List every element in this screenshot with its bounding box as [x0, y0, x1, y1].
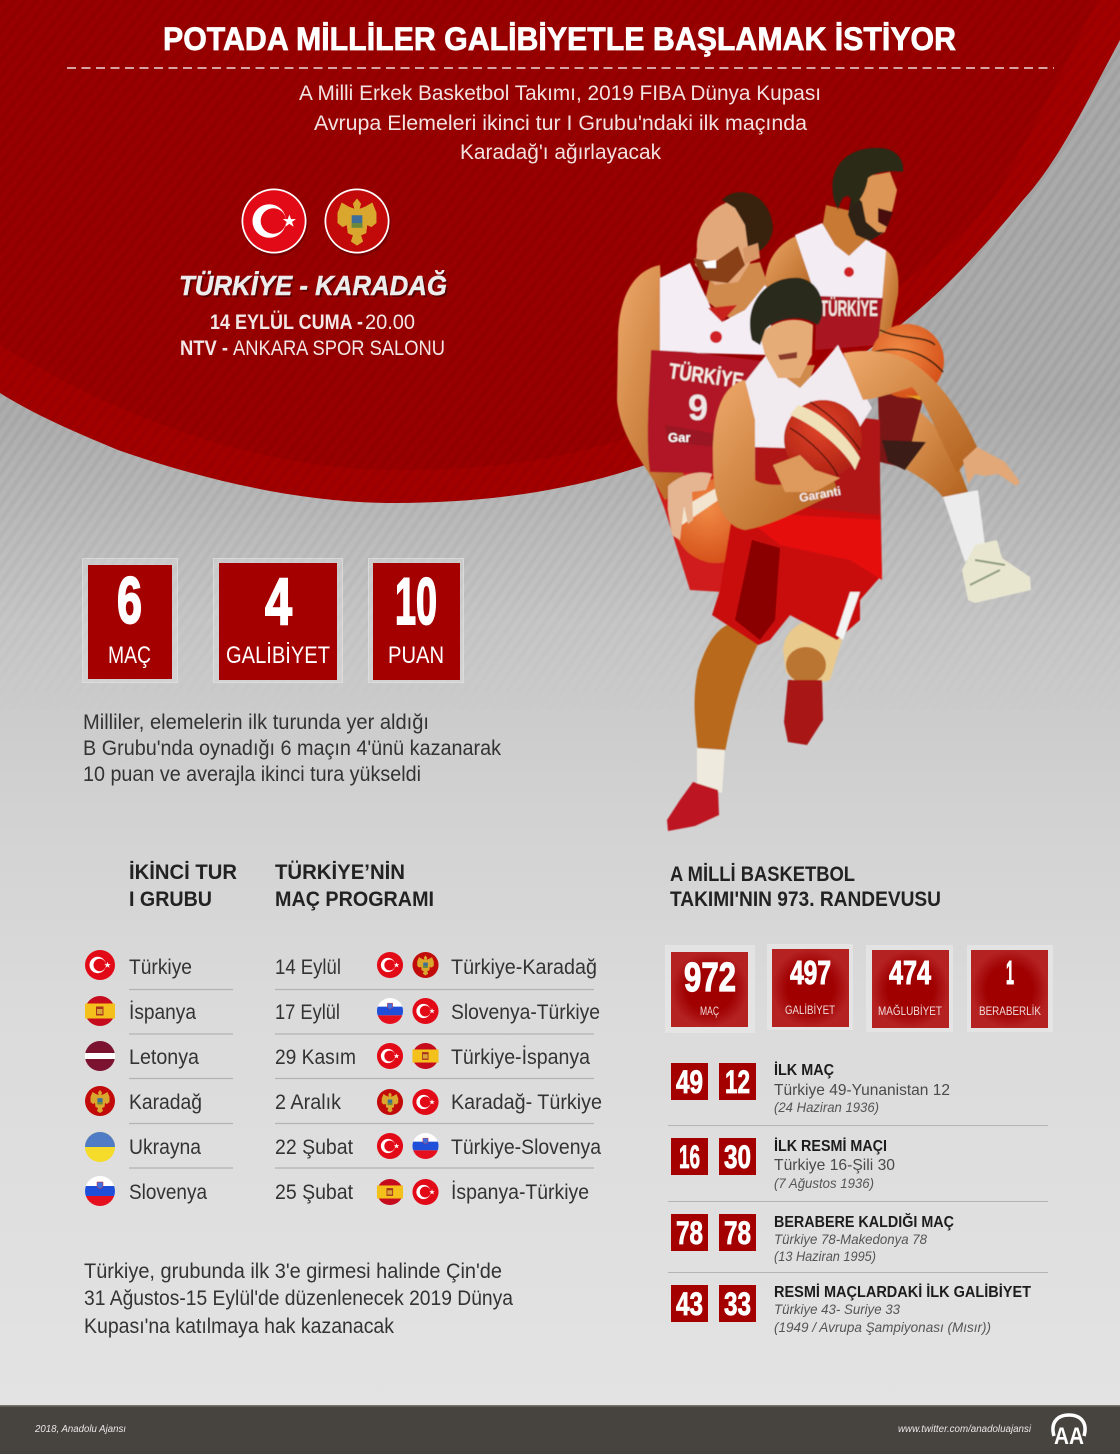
- subtitle: A Milli Erkek Basketbol Takımı, 2019 FIBA Dünya Kupası: [299, 82, 821, 105]
- stat box: 1 beraberlik: 1: [1006, 954, 1014, 991]
- match schedule: İspanya-Türkiye: [451, 1181, 589, 1204]
- match schedule: Slovenya-Türkiye: [451, 1001, 600, 1024]
- icon: Anadolu Agency logo: [1053, 1415, 1085, 1450]
- record row: first match: 12: [725, 1064, 750, 1100]
- stat box: 4 galibiyet: [214, 558, 342, 682]
- match schedule: Türkiye-İspanya: [451, 1046, 590, 1069]
- heading: 973rd match: A MİLLİ BASKETBOL: [670, 863, 855, 886]
- heading: 973rd match: TAKIMI'NIN 973. RANDEVUSU: [670, 888, 941, 911]
- match date and venue: [180, 311, 445, 360]
- record row: first official win: (1949 / Avrupa Şampiyonası (Mısır)): [774, 1319, 991, 1335]
- paragraph: first round result: [83, 711, 501, 786]
- stat box: 6 maç: [82, 558, 178, 682]
- subtitle: Karadağ'ı ağırlayacak: [460, 141, 661, 164]
- match date and venue: 20.00: [365, 311, 415, 334]
- record row: drawn match: Türkiye 78-Makedonya 78: [774, 1231, 927, 1247]
- match schedule: 25 Şubat: [275, 1181, 353, 1204]
- match schedule: 29 Kasım: [275, 1046, 356, 1069]
- record row: first match: İLK MAÇ: [774, 1061, 834, 1079]
- stat box: 6 maç: MAÇ: [108, 642, 151, 669]
- group list: [85, 950, 233, 1206]
- record row: drawn match: (13 Haziran 1995): [774, 1248, 876, 1264]
- stat box: 972 maç: [666, 946, 754, 1032]
- record row: first match: (24 Haziran 1936): [774, 1099, 879, 1115]
- match schedule: 14 Eylül: [275, 956, 341, 979]
- heading: group: [129, 861, 237, 911]
- left player: 9: [688, 387, 708, 428]
- subtitle: Avrupa Elemeleri ikinci tur I Grubu'ndaki ilk maçında: [314, 112, 807, 135]
- record row: first match: [671, 1061, 950, 1115]
- record row: drawn match: 78: [724, 1215, 751, 1251]
- record row: first official match: [671, 1137, 895, 1191]
- heading: group: I GRUBU: [129, 888, 212, 911]
- title: POTADA MİLLİLER GALİBİYETLE BAŞLAMAK İSTİYOR: [163, 21, 956, 57]
- stat box: 4 galibiyet: 4: [265, 564, 292, 638]
- players illustration: [617, 148, 1031, 831]
- red header shape: [0, 0, 1120, 503]
- stat box: 1 beraberlik: BERABERLİK: [979, 1004, 1041, 1018]
- record row: first official match: 16: [679, 1139, 700, 1175]
- heading: match schedule: MAÇ PROGRAMI: [275, 888, 434, 911]
- stat box: 10 puan: PUAN: [388, 642, 444, 669]
- front player: [667, 278, 1020, 831]
- heading: group: İKİNCİ TUR: [129, 861, 237, 884]
- match date and venue: 14 EYLÜL CUMA -: [210, 311, 363, 334]
- stat box: 474 mağlubiyet: MAĞLUBİYET: [878, 1003, 943, 1018]
- stat box: 474 mağlubiyet: [866, 946, 952, 1032]
- stat box: 6 maç: 6: [117, 563, 142, 637]
- group list: Karadağ: [129, 1091, 202, 1114]
- record row: first official win: Türkiye 43- Suriye 33: [774, 1301, 900, 1317]
- match schedule: 2 Aralık: [275, 1091, 341, 1114]
- group list: İspanya: [129, 1001, 196, 1024]
- footer: www.twitter.com/anadoluajansi: [898, 1424, 1032, 1435]
- record row: drawn match: BERABERE KALDIĞI MAÇ: [774, 1212, 954, 1231]
- paragraph: World Cup qualification: [84, 1260, 513, 1338]
- dashed title rule: [67, 67, 1054, 69]
- heading: match schedule: [275, 861, 434, 911]
- front player: Garanti: [798, 484, 842, 505]
- record row: drawn match: 78: [676, 1215, 703, 1251]
- match title: TÜRKİYE - KARADAĞ: [181, 272, 449, 303]
- record row: first official win: 33: [724, 1286, 751, 1322]
- group list: Slovenya: [129, 1181, 207, 1204]
- match schedule: [275, 952, 602, 1205]
- stat box: 1 beraberlik: [968, 946, 1052, 1032]
- group list: Letonya: [129, 1046, 199, 1069]
- paragraph: first round result: Milliler, elemelerin ilk turunda yer aldığı: [83, 711, 429, 734]
- record row: first official match: (7 Ağustos 1936): [774, 1175, 874, 1191]
- record row: first official win: RESMİ MAÇLARDAKİ İLK GALİBİYET: [774, 1283, 1031, 1301]
- back player: TÜRKİYE: [820, 296, 878, 321]
- back player: [765, 148, 1031, 603]
- heading: match schedule: TÜRKİYE’NİN: [275, 861, 405, 884]
- icon: Montenegro flag large: [324, 188, 391, 256]
- match title: TÜRKİYE - KARADAĞ: [179, 270, 447, 301]
- left player: TÜRKİYE: [667, 358, 745, 393]
- match date and venue: NTV -: [180, 337, 228, 360]
- group list: Türkiye: [129, 956, 192, 979]
- match schedule: Türkiye-Karadağ: [451, 956, 597, 979]
- left player: [617, 192, 773, 592]
- group list: Ukrayna: [129, 1136, 201, 1159]
- match schedule: Türkiye-Slovenya: [451, 1136, 601, 1159]
- stat box: 972 maç: 972: [684, 954, 736, 1000]
- stat box: 972 maç: MAÇ: [700, 1004, 719, 1018]
- paragraph: World Cup qualification: Kupası'na katılmaya hak kazanacak: [84, 1315, 394, 1338]
- stat box: 10 puan: [368, 558, 464, 682]
- heading: 973rd match: [670, 863, 941, 911]
- subtitle: [299, 82, 821, 164]
- stat box: 4 galibiyet: GALİBİYET: [226, 642, 330, 669]
- icon: Anadolu Agency logo: AA: [1054, 1423, 1084, 1450]
- record row: first official win: 43: [676, 1286, 703, 1322]
- record row: first official match: İLK RESMİ MAÇI: [774, 1137, 887, 1155]
- record row: first official win: [671, 1283, 1031, 1335]
- stat box: 497 galibiyet: GALİBİYET: [785, 1003, 836, 1017]
- match schedule: Karadağ- Türkiye: [451, 1091, 602, 1114]
- match date and venue: ANKARA SPOR SALONU: [233, 337, 445, 360]
- stat box: 497 galibiyet: 497: [790, 954, 831, 991]
- record row: first official match: 30: [724, 1139, 751, 1175]
- paragraph: World Cup qualification: Türkiye, grubunda ilk 3'e girmesi halinde Çin'de: [84, 1260, 502, 1283]
- record row: first match: 49: [676, 1064, 703, 1100]
- stat box: 474 mağlubiyet: 474: [889, 954, 931, 991]
- stat box: 10 puan: 10: [395, 564, 437, 638]
- footer: 2018, Anadolu Ajansı: [34, 1424, 126, 1435]
- paragraph: first round result: B Grubu'nda oynadığı 6 maçın 4'ünü kazanarak: [83, 737, 501, 760]
- footer: [0, 1405, 1120, 1454]
- record row: first official match: Türkiye 16-Şili 30: [774, 1157, 895, 1174]
- record row: drawn match: [671, 1212, 954, 1264]
- record row: first match: Türkiye 49-Yunanistan 12: [774, 1082, 950, 1099]
- stat box: 497 galibiyet: [768, 944, 852, 1030]
- match schedule: 22 Şubat: [275, 1136, 353, 1159]
- left player: Gar: [668, 430, 690, 445]
- paragraph: first round result: 10 puan ve averajla ikinci tura yükseldi: [83, 763, 421, 786]
- match schedule: 17 Eylül: [275, 1001, 340, 1024]
- paragraph: World Cup qualification: 31 Ağustos-15 Eylül'de düzenlenecek 2019 Dünya: [84, 1287, 513, 1310]
- icon: Turkey flag large: [242, 188, 308, 256]
